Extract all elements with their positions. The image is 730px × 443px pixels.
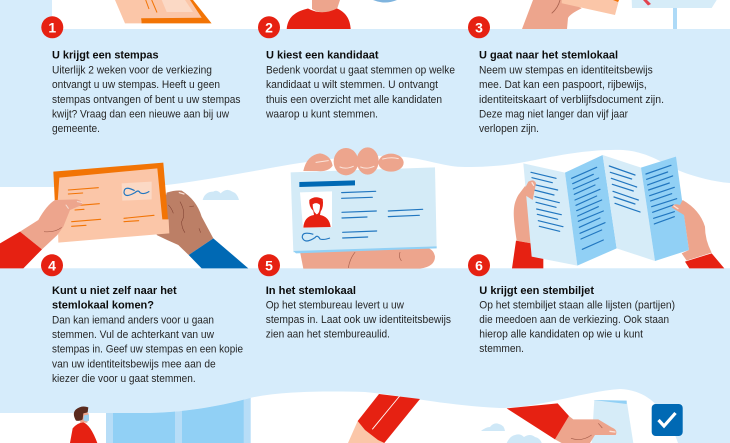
step number 1 [41,16,63,38]
text block: step 1 [52,50,241,135]
ballot panels [523,163,577,266]
text block: step 4: van uw identiteitsbewijs mee aan de [52,358,216,370]
text block: step 1: kwijt? Vraag dan een nieuwe aan bij uw [52,108,229,120]
fingers [303,147,404,175]
text block: step 1: Uiterlijk 2 weken voor de verkiezing [52,65,212,77]
text block: step 4: kiezer die voor u gaat stemmen. [52,373,196,385]
illustration: person cut off at top [287,0,397,29]
signature box [122,182,152,201]
step number 5 [258,254,280,276]
text block: step 3 [479,50,664,135]
step number 3 [468,16,490,38]
text block: step 3: Deze mag niet langer dan vijf jaar [479,108,628,120]
passport photo [300,191,332,228]
card [291,167,437,252]
pass text lines [68,188,154,226]
step number 6: 6 [475,258,483,274]
white band: middle row [0,150,730,268]
text block: step 2 [265,50,455,121]
illustration: hands holding folded ballot [512,155,724,268]
illustration: polling station window [106,398,251,443]
text block: step 6: U krijgt een stembiljet [479,285,594,297]
text block: step 1: U krijgt een stempas [52,50,158,62]
hand [555,416,616,443]
white band: bottom row [0,389,678,443]
text block: step 2: kandidaat u wilt stemmen. U ontvangt [266,79,438,91]
illustration: hand with envelope and polling sign [522,0,717,29]
text block: step 2: thuis een overzicht met alle kandidaten [266,94,442,106]
text block: step 1: stempas ontvangen of bent u uw stempas [52,94,241,106]
text block: step 4: stemmen. Vul de achterkant van uw [52,329,214,341]
signature [302,233,330,241]
left hand [20,199,82,249]
folded ballot [592,400,633,443]
icon: blue check box [652,404,683,436]
text block: step 4: Kunt u niet zelf naar het [52,285,177,297]
text block: step 2: Bedenk voordat u gaat stemmen op welke [266,65,455,77]
step number 2 [258,16,280,38]
step number 2: 2 [265,20,273,36]
text block: step 5: Op het stembureau levert u uw [266,299,404,311]
orange pass frame [53,163,168,228]
text block: step 2: waarop u kunt stemmen. [265,108,378,120]
cloud [203,190,239,200]
text block: step 5: In het stemlokaal [266,285,356,297]
text block: step 5 [266,285,452,341]
illustration: hand holding identity card [291,147,437,269]
red sleeve [507,403,569,439]
text block: step 2: U kiest een kandidaat [266,50,379,62]
ballot lines [531,172,563,231]
brown hand [157,191,213,255]
illustration: hand giving ballot [507,400,633,443]
step number 4 [41,254,63,276]
text block: step 3: U gaat naar het stemlokaal [479,50,618,62]
text block: step 4: Dan kan iemand anders voor u gaan [52,314,214,326]
card lines [342,191,423,238]
icons: clouds [481,423,542,443]
step number 5: 5 [265,258,273,274]
step number 3: 3 [475,20,483,36]
right hand [672,200,712,261]
text block: step 5: stempas in. Laat ook uw identiteitsbewijs [266,314,452,326]
text block: step 6: hierop alle kandidaten op wie u kunt [479,329,643,341]
text block: step 6: die meedoen aan de verkiezing. Ook staan [479,314,669,326]
illustration: two hands holding voting pass [0,163,248,268]
thumb on left hand [522,180,536,200]
palm and thumb [299,247,435,269]
illustration: voting pass cut off at top [115,0,212,23]
text block: step 1: gemeente. [52,123,100,135]
card header bar [299,180,355,187]
blue sleeve [189,238,248,268]
step number 1: 1 [48,20,56,36]
text block: step 5: zien aan het stembureaulid. [266,329,390,341]
text block: step 4: stempas in. Geef uw stempas en een kopie [52,344,243,356]
left hand [514,180,536,244]
text block: step 6 [479,285,675,355]
text block: step 3: verlopen zijn. [479,123,539,135]
text block: step 1: ontvangt u uw stempas. Heeft u geen [52,79,220,91]
text block: step 6: Op het stembiljet staan alle lijsten (partijen) [479,299,675,311]
text block: step 4 [52,285,243,385]
step number 6 [468,254,490,276]
text block: step 3: identiteitskaart of verblijfsdocument zijn. [479,94,664,106]
illustration: person with face mask [70,407,97,443]
red sleeve [0,232,42,268]
white band: top row [52,0,730,29]
illustration: arm with sleeve, bottom centre [348,394,420,443]
peach pass face [57,168,169,243]
text block: step 3: Neem uw stempas en identiteitsbewijs [479,65,653,77]
text block: step 6: stemmen. [479,343,524,355]
text block: step 4: stemlokaal komen? [52,300,154,312]
text block: step 3: mee. Dat kan een paspoort, rijbewijs, [479,79,647,91]
step number 4: 4 [48,258,56,274]
